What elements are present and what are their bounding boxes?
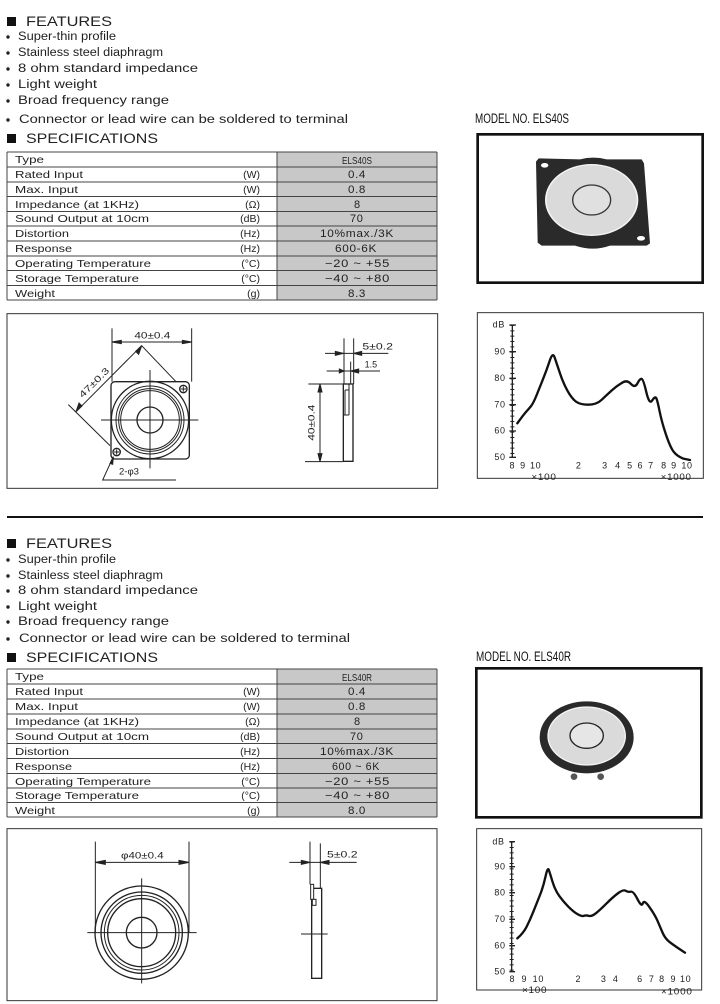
front view drawing (87, 842, 197, 983)
specifications table: (°C) (241, 790, 260, 802)
axis labels: 60 (494, 940, 506, 950)
axis labels: ×1000 (661, 986, 693, 996)
axis labels (493, 319, 693, 482)
section: ELS40R (6, 536, 702, 1001)
axis (509, 842, 515, 972)
model label: MODEL NO. ELS40R (476, 649, 571, 664)
heading: specifications: SPECIFICATIONS (26, 131, 158, 146)
feature list: Super-thin profile (18, 31, 116, 43)
response curve (517, 355, 690, 460)
specifications table: (Ω) (245, 716, 260, 728)
specifications table: ELS40S (342, 155, 372, 167)
dimension labels (121, 849, 358, 860)
section: ELS40S (6, 14, 703, 488)
specifications table: 8.3 (348, 288, 366, 300)
specifications table: Response (15, 243, 72, 255)
specifications table: 8 (354, 199, 361, 211)
axis labels: 9 (520, 461, 526, 471)
axis labels (492, 836, 693, 996)
axis labels: 90 (494, 346, 506, 356)
feature list: Connector or lead wire can be soldered to terminal (19, 114, 348, 126)
heading: features (7, 14, 112, 29)
specifications table: Weight (15, 288, 55, 300)
axis labels: 80 (494, 373, 506, 383)
axis labels: dB (492, 836, 505, 846)
dimension labels (77, 331, 393, 477)
specifications table: Rated Input (15, 686, 83, 698)
heading: features: FEATURES (26, 14, 112, 29)
axis labels: 4 (615, 461, 621, 471)
specifications table: 0.4 (348, 686, 366, 698)
feature list: Connector or lead wire can be soldered to terminal (19, 633, 350, 645)
axis labels: 3 (601, 974, 607, 984)
specifications table: (Ω) (245, 199, 260, 211)
axis labels: 50 (494, 452, 506, 462)
specifications table: (W) (243, 686, 260, 698)
specifications table: (Hz) (240, 228, 260, 240)
divider (7, 516, 703, 518)
specifications table: 0.4 (348, 169, 366, 181)
specifications table: 70 (350, 731, 363, 743)
specifications table: Operating Temperature (15, 258, 151, 270)
axis labels: 50 (494, 966, 506, 976)
specifications table: (g) (247, 288, 260, 300)
specifications table: Impedance (at 1KHz) (15, 199, 139, 211)
axis labels: 2 (576, 461, 582, 471)
axis labels: 80 (494, 887, 506, 897)
panel: product photo (476, 668, 701, 817)
axis labels: 10 (530, 461, 541, 471)
specifications table: Type (15, 671, 44, 683)
specifications table: Distortion (15, 746, 69, 758)
axis labels: 10 (533, 974, 544, 984)
specifications table: 8 (354, 716, 361, 728)
specifications table: (°C) (241, 776, 260, 788)
panel: frequency response chart (477, 829, 702, 996)
specifications table: −40 ~ +80 (325, 790, 390, 802)
front view drawing (68, 328, 198, 480)
side view drawing (289, 842, 357, 978)
axis labels: dB (493, 319, 505, 329)
dimension labels: 5±0.2 (327, 849, 358, 859)
specifications table: Storage Temperature (15, 790, 139, 802)
dimension labels: 1.5 (365, 359, 377, 369)
dimension labels: 40±0.4 (307, 405, 317, 441)
axis labels: 70 (494, 399, 506, 409)
specifications table: 0.8 (348, 701, 366, 713)
axis labels: 7 (648, 461, 654, 471)
axis labels: 7 (649, 974, 655, 984)
feature list: Stainless steel diaphragm (18, 47, 163, 59)
specifications table: −20 ~ +55 (325, 258, 390, 270)
panel: dimension drawing (7, 314, 438, 488)
feature list: Super-thin profile (18, 554, 116, 566)
specifications table (7, 152, 437, 300)
panel: dimension drawing (7, 829, 437, 1001)
specifications table: Type (15, 154, 44, 166)
specifications table: −40 ~ +80 (325, 273, 390, 285)
dimension labels: 2-φ3 (119, 467, 139, 477)
axis labels: 6 (637, 974, 643, 984)
specifications table: Weight (15, 805, 55, 817)
axis labels: 4 (613, 974, 619, 984)
specifications table: 70 (350, 213, 363, 225)
specifications table: Response (15, 761, 72, 773)
feature list: 8 ohm standard impedance (18, 585, 198, 597)
specifications table: (dB) (240, 731, 260, 743)
specifications table: (°C) (241, 258, 260, 270)
specifications table: Max. Input (15, 701, 78, 713)
feature list: Broad frequency range (18, 616, 169, 628)
specifications table: Impedance (at 1KHz) (15, 716, 139, 728)
specifications table: Sound Output at 10cm (15, 731, 149, 743)
axis labels: 8 (509, 461, 515, 471)
heading: features: FEATURES (26, 536, 112, 551)
specifications table: (dB) (240, 213, 260, 225)
axis labels: 90 (494, 861, 506, 871)
heading: features (7, 536, 112, 551)
axis labels: 70 (494, 914, 506, 924)
axis labels: 2 (575, 974, 581, 984)
axis labels: 9 (670, 974, 676, 984)
feature list: Broad frequency range (18, 95, 169, 107)
axis labels: ×1000 (661, 472, 692, 482)
specifications table: (°C) (241, 273, 260, 285)
specifications table: 10%max./3K (320, 746, 394, 758)
specifications table: Distortion (15, 228, 69, 240)
axis labels: ×100 (531, 472, 557, 482)
specifications table: Operating Temperature (15, 776, 151, 788)
axis (509, 325, 516, 457)
specifications table: (Hz) (240, 243, 260, 255)
specifications table: 600-6K (335, 243, 377, 255)
axis labels: ×100 (522, 985, 547, 995)
feature list (6, 554, 350, 645)
dimension labels: φ40±0.4 (121, 850, 164, 860)
axis labels: 3 (602, 461, 608, 471)
axis labels: 9 (521, 974, 527, 984)
axis labels: 6 (637, 461, 643, 471)
axis labels: 8 (661, 461, 667, 471)
response curve (517, 869, 685, 953)
specifications table: (W) (243, 184, 260, 196)
specifications table: (g) (247, 805, 260, 817)
feature list: 8 ohm standard impedance (18, 63, 198, 75)
specifications table: 0.8 (348, 184, 366, 196)
dimension labels: 47±0.3 (77, 366, 111, 400)
specifications table: ELS40R (342, 672, 372, 684)
axis labels: 10 (681, 461, 693, 471)
specifications table: Max. Input (15, 184, 78, 196)
feature list: Light weight (18, 601, 98, 613)
specifications table: Sound Output at 10cm (15, 213, 149, 225)
model label: MODEL NO. ELS40S (475, 111, 569, 126)
feature list (6, 31, 348, 126)
feature list: Stainless steel diaphragm (18, 570, 163, 582)
axis labels: 8 (509, 974, 515, 984)
specifications table (7, 669, 437, 817)
side view drawing (305, 338, 388, 462)
specifications table: 600 ~ 6K (332, 761, 380, 773)
specifications table: Rated Input (15, 169, 83, 181)
specifications table: Storage Temperature (15, 273, 139, 285)
specifications table: 8.0 (348, 805, 366, 817)
axis labels: 5 (627, 461, 633, 471)
axis labels: 10 (680, 974, 691, 984)
dimension labels: 40±0.4 (134, 331, 170, 341)
specifications table: 10%max./3K (320, 228, 394, 240)
heading: specifications: SPECIFICATIONS (26, 650, 158, 665)
specifications table: (Hz) (240, 746, 260, 758)
dimension labels: 5±0.2 (362, 341, 393, 351)
feature list: Light weight (18, 79, 98, 91)
specifications table: (W) (243, 701, 260, 713)
axis labels: 9 (671, 461, 677, 471)
panel: frequency response chart (477, 313, 703, 482)
specifications table: (Hz) (240, 761, 260, 773)
axis labels: 60 (494, 426, 506, 436)
specifications table: (W) (243, 169, 260, 181)
specifications table: −20 ~ +55 (325, 776, 390, 788)
axis labels: 8 (659, 974, 665, 984)
panel: product photo (478, 134, 703, 283)
